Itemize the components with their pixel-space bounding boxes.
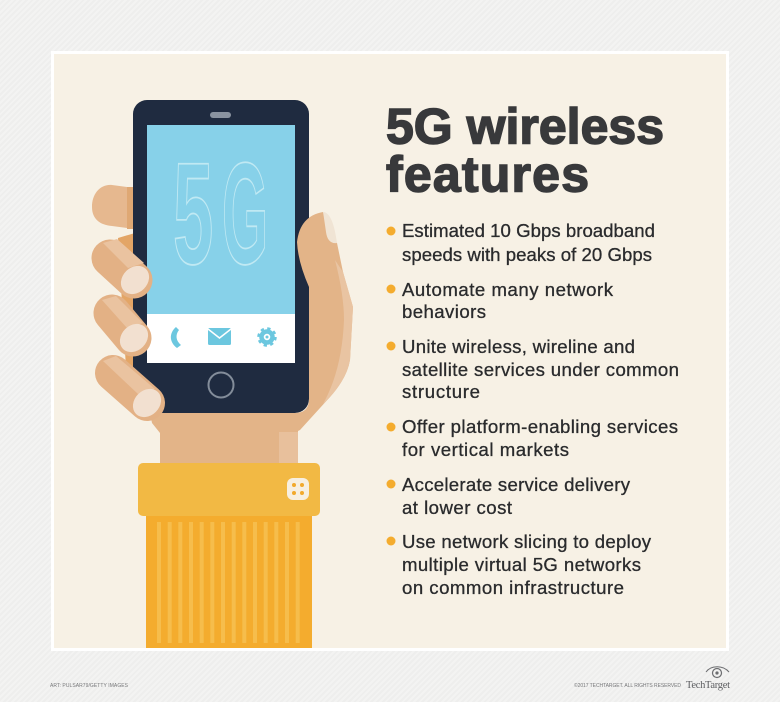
wrist highlight (279, 432, 298, 465)
heading (386, 98, 664, 202)
cuff (138, 463, 320, 516)
bullet 5: at lower cost (402, 497, 513, 518)
heading: features (386, 146, 589, 202)
5G outline text (173, 133, 268, 295)
bullet 4 (386, 416, 678, 460)
thumb nail (323, 212, 337, 243)
bullet 2 (386, 279, 614, 322)
bullet 6: multiple virtual 5G networks (402, 554, 641, 575)
shadow between fingers (118, 233, 135, 400)
bullet 2: Automate many network (402, 279, 614, 300)
icon: phone call (171, 327, 181, 348)
cuff button (287, 478, 309, 500)
icon: envelope (208, 328, 231, 345)
finger 4 (103, 356, 167, 423)
bullet 3 (386, 336, 679, 402)
bullet 6 (386, 531, 652, 598)
speaker (210, 112, 231, 118)
art credit: ART: PULSAR79/GETTY IMAGES (50, 683, 129, 689)
home button (208, 372, 234, 398)
bullet 6: on common infrastructure (402, 577, 624, 598)
finger 3 (102, 296, 154, 358)
bullet 6: Use network slicing to deploy (402, 531, 652, 552)
bullet 3: satellite services under common (402, 359, 679, 380)
bullet 1 (386, 220, 655, 265)
sleeve (146, 512, 312, 648)
bullet 1: Estimated 10 Gbps broadband (402, 220, 655, 241)
feature list (386, 220, 679, 598)
bullet 4: Offer platform-enabling services (402, 416, 678, 437)
heading: 5G wireless (386, 98, 664, 154)
bullet 1: speeds with peaks of 20 Gbps (402, 244, 652, 265)
bullet 2: behaviors (402, 301, 486, 322)
illustration: hand holding phone (92, 100, 353, 648)
bullet 3: structure (402, 381, 480, 402)
bullet 5 (386, 474, 631, 518)
finger 2 (103, 239, 155, 300)
logo: TechTarget: TechTarget (686, 680, 730, 691)
bullet 3: Unite wireless, wireline and (402, 336, 635, 357)
phone (133, 100, 309, 413)
logo: TechTarget (686, 667, 730, 691)
5G outline text: G (222, 134, 268, 295)
panel: cream card (52, 52, 728, 650)
bullet 4: for vertical markets (402, 439, 569, 460)
bullet 5: Accelerate service delivery (402, 474, 631, 495)
5G outline text: 5 (173, 133, 213, 295)
copyright: ©2017 TECHTARGET. ALL RIGHTS RESERVED (574, 682, 681, 689)
hand palm and thumb (150, 212, 353, 465)
icon: gear (258, 328, 276, 346)
top finger behind phone (92, 185, 135, 229)
thumb edge highlight (323, 260, 353, 404)
